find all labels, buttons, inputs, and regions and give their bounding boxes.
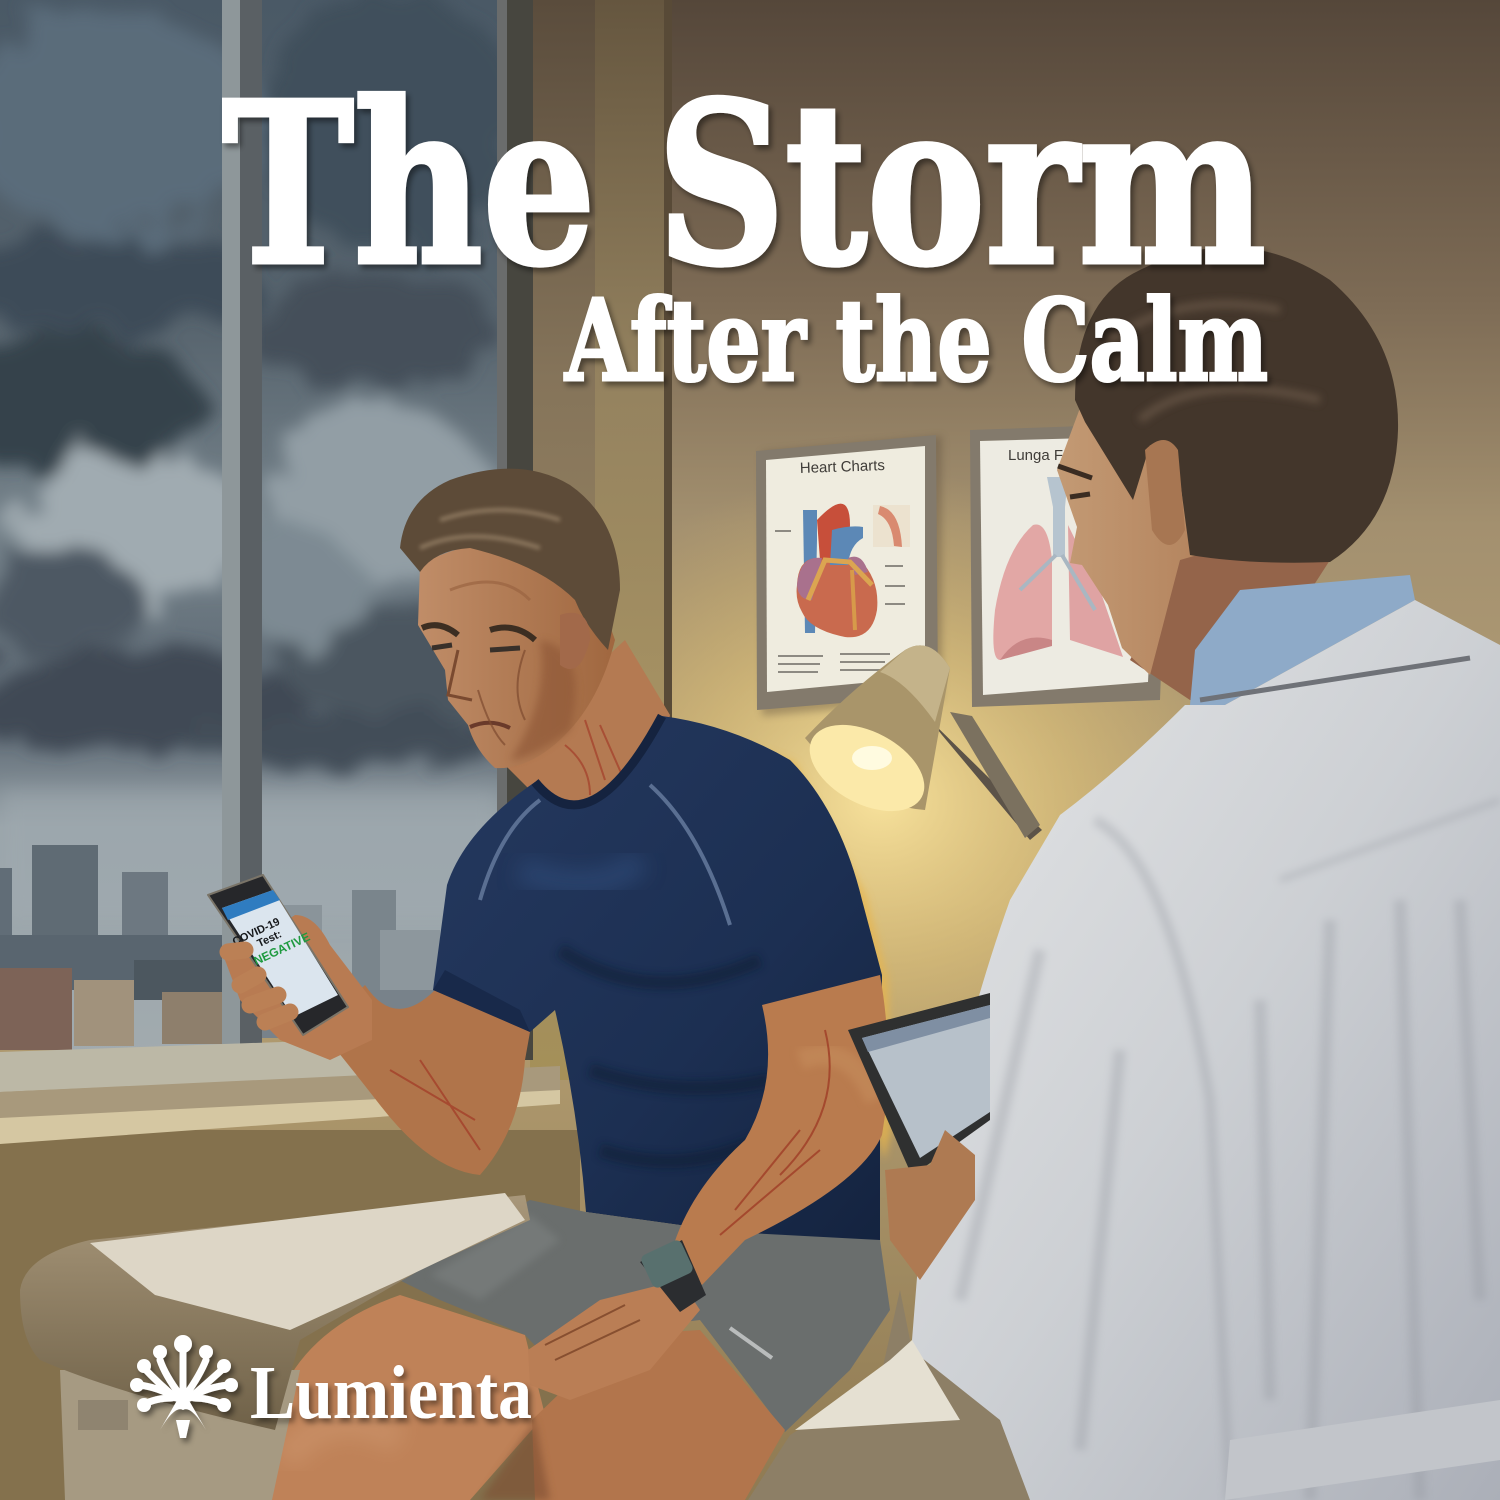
window casing <box>505 0 672 1080</box>
legs <box>272 1295 545 1500</box>
shorts <box>395 1200 890 1432</box>
patient figure <box>208 469 892 1500</box>
heart diagram <box>797 504 877 637</box>
poster fine print <box>775 530 905 673</box>
right upper arm and forearm <box>672 975 888 1285</box>
neck <box>500 640 670 825</box>
heart detail inset <box>873 505 910 547</box>
shirt folds <box>560 950 780 1161</box>
eye and brow <box>1058 466 1092 497</box>
coat folds <box>960 800 1500 1500</box>
sleeve left <box>433 970 530 1032</box>
head <box>1057 400 1300 675</box>
white coat <box>912 600 1500 1500</box>
smartwatch <box>639 1238 706 1312</box>
title <box>222 55 1268 407</box>
nose and mouth <box>448 650 472 700</box>
title line two: After the Calm <box>564 276 1268 407</box>
logo: Lumienta <box>130 1335 532 1438</box>
ear <box>560 613 590 669</box>
phone text <box>231 907 312 973</box>
brows eyes <box>422 625 535 640</box>
tablet <box>848 993 990 1176</box>
torso shirt <box>433 716 882 1242</box>
title line one: The Storm <box>222 55 1266 315</box>
hand on tablet <box>885 1130 975 1280</box>
phone text: NEGATIVE <box>251 930 312 968</box>
hair <box>400 469 620 650</box>
neck <box>1130 540 1330 700</box>
poster title: Heart Charts <box>800 457 885 477</box>
phone text: Test: <box>256 928 284 950</box>
ear <box>1145 440 1185 545</box>
poster title: Lunga F <box>1008 447 1063 464</box>
phone text: COVID-19 <box>231 916 282 948</box>
window frame <box>0 0 560 1144</box>
heart poster <box>756 435 942 716</box>
skyline <box>0 845 440 1038</box>
head <box>400 469 620 768</box>
doctor figure <box>848 247 1500 1500</box>
lungs poster <box>970 423 1170 707</box>
lungs diagram <box>993 477 1123 660</box>
smartphone <box>208 875 348 1035</box>
hand holding phone <box>225 915 372 1060</box>
left forearm <box>320 985 530 1175</box>
fingers <box>228 950 290 1022</box>
lamp opening <box>795 707 939 829</box>
logo mark <box>130 1335 238 1438</box>
logo wordmark: Lumienta <box>250 1351 532 1435</box>
hair <box>1075 247 1398 563</box>
window view: storm clouds and city <box>0 0 520 1060</box>
hand on knee <box>528 1280 700 1400</box>
blue shirt collar <box>1190 575 1415 705</box>
shirt rim glow <box>720 735 892 1160</box>
examination table <box>20 1193 1030 1500</box>
paper cover <box>90 1193 525 1330</box>
desk lamp <box>795 645 1042 840</box>
